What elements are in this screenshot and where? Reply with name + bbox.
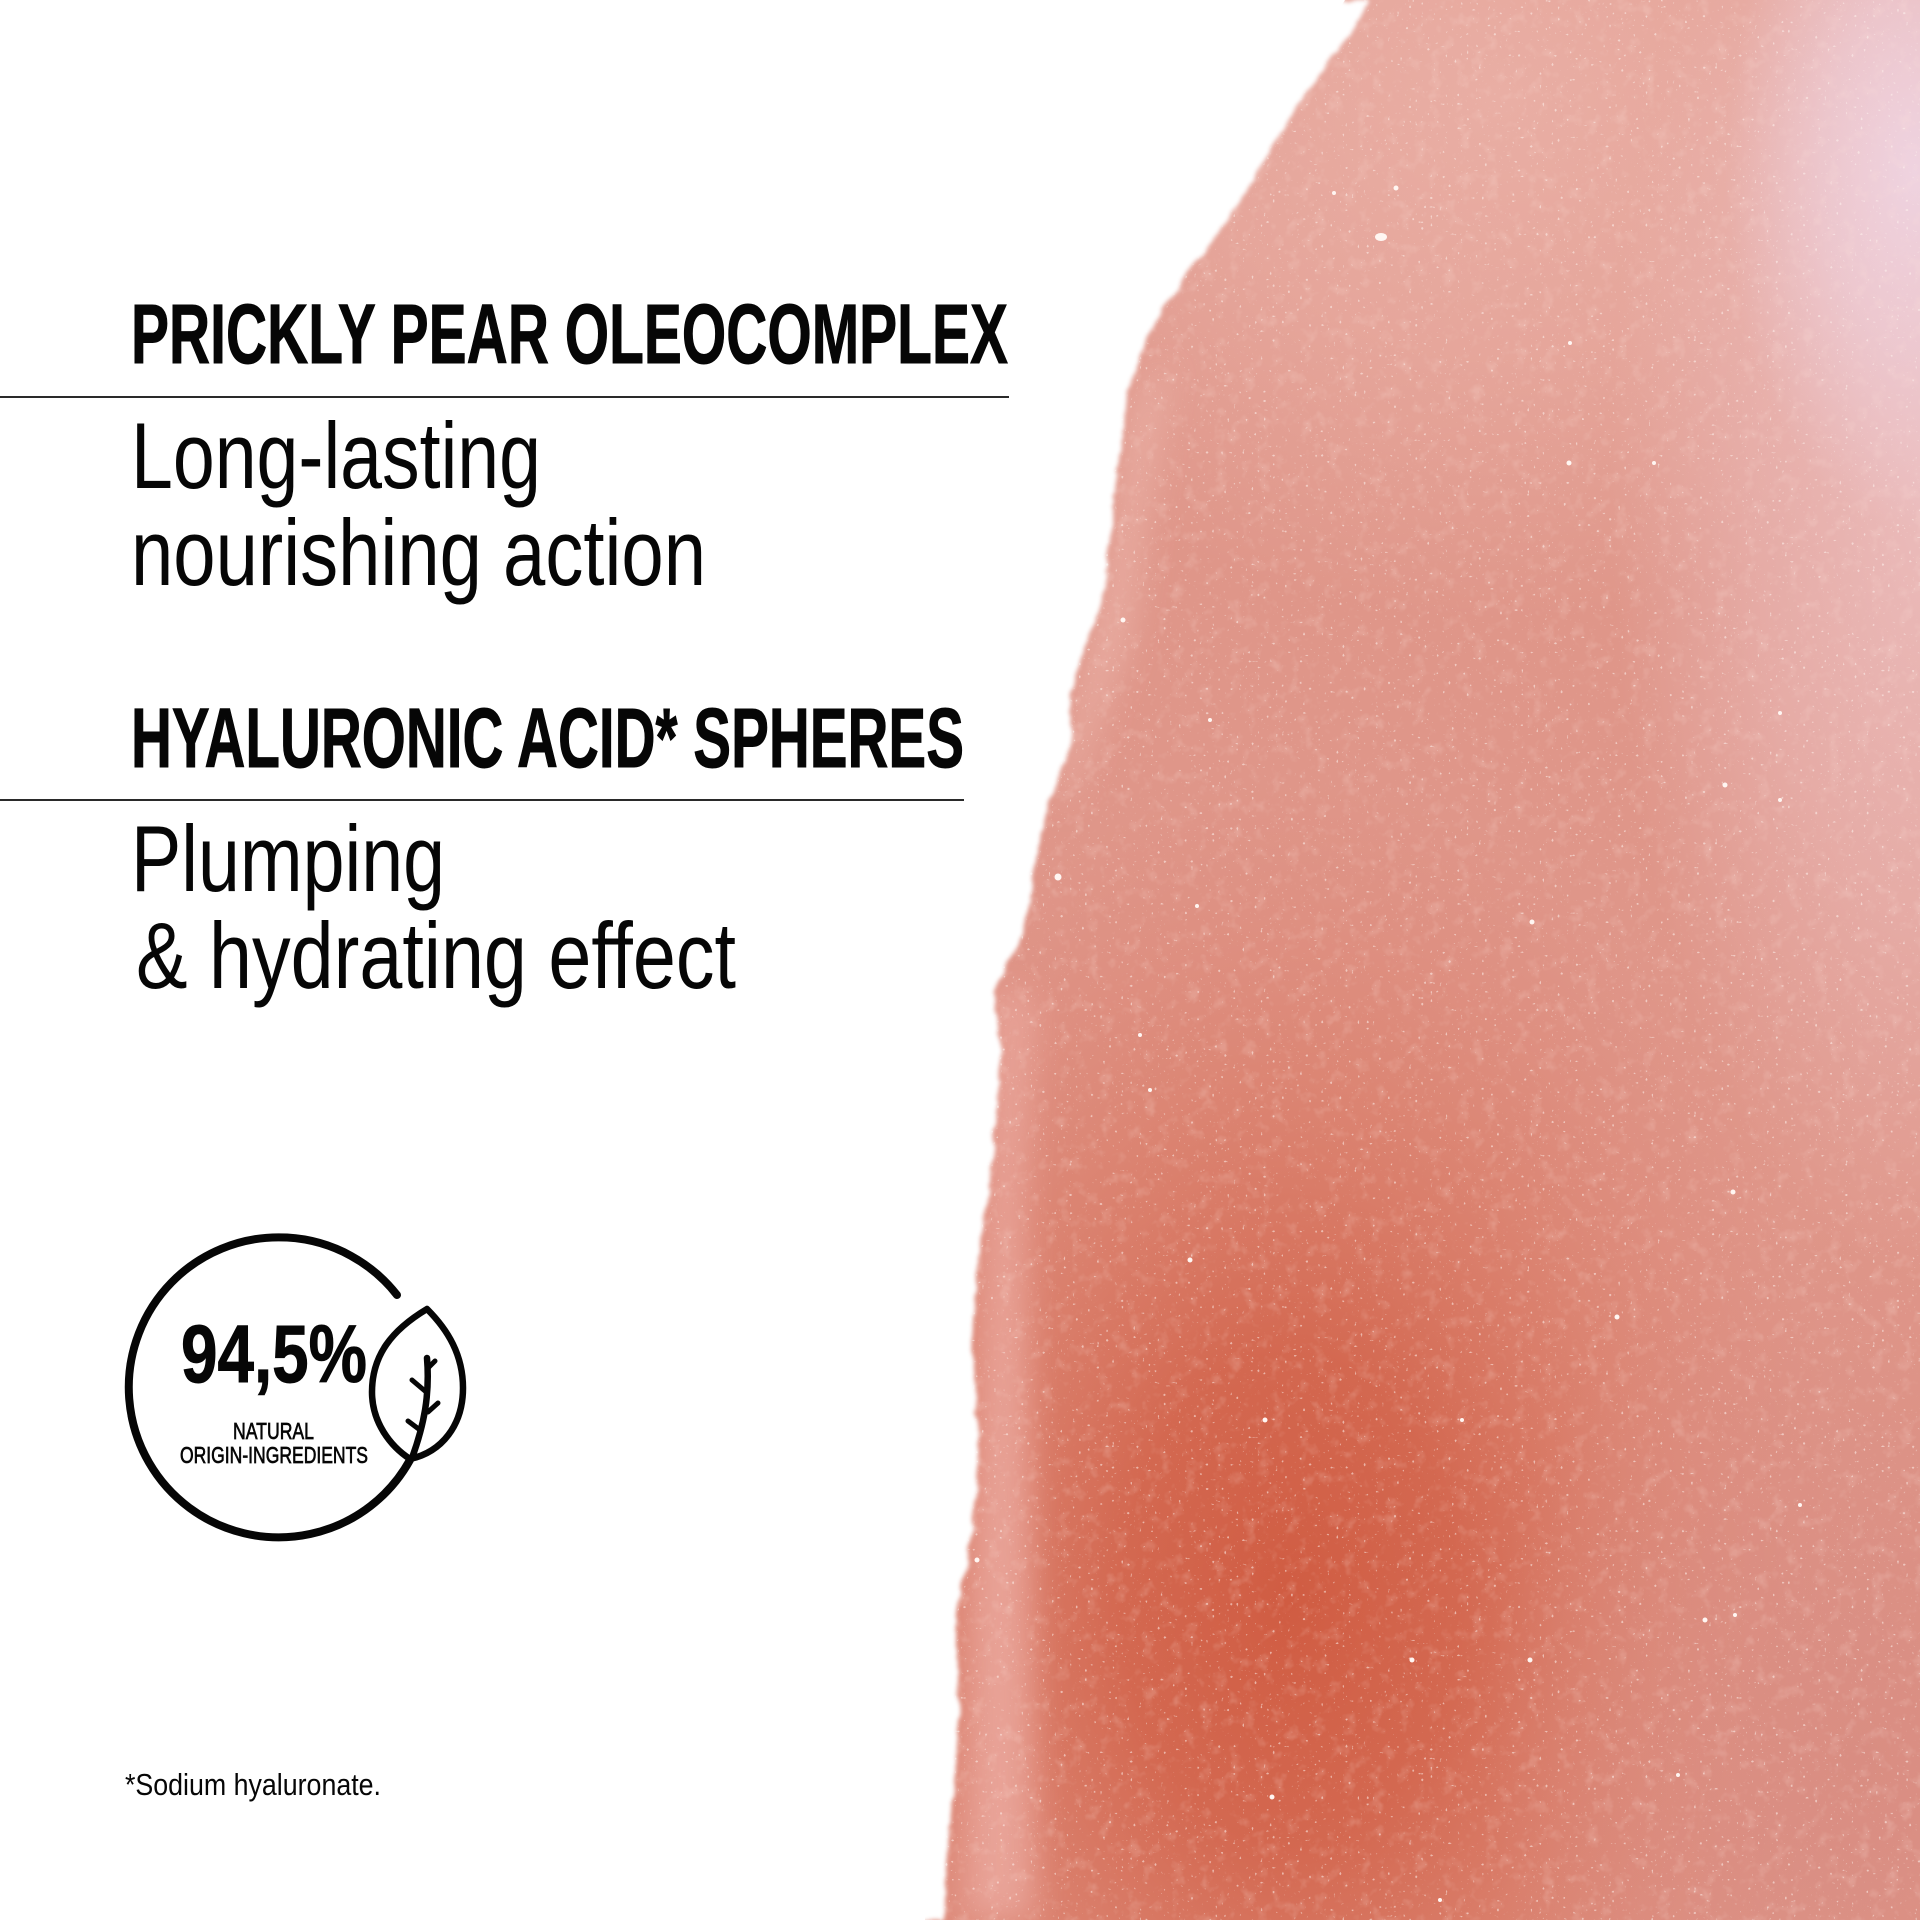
text block: plumping and hydrating effect bbox=[131, 806, 736, 1008]
footnote: *Sodium hyaluronate. bbox=[125, 1767, 381, 1802]
divider line 2 bbox=[0, 799, 964, 801]
heading: prickly pear oleocomplex: PRICKLY PEAR OLEOCOMPLEX bbox=[131, 287, 1008, 381]
image: pink-coral gel texture bbox=[880, 0, 1920, 1920]
text block: plumping and hydrating effect: & hydrating effect bbox=[136, 903, 736, 1008]
label: natural origin-ingredients bbox=[180, 1418, 368, 1468]
text block: plumping and hydrating effect: Plumping bbox=[131, 806, 445, 911]
text block: long-lasting nourishing action: nourishing action bbox=[131, 500, 706, 605]
icon: leaf bbox=[372, 1309, 463, 1459]
text block: long-lasting nourishing action: Long-lasting bbox=[131, 403, 541, 508]
icon: open circle bbox=[129, 1237, 410, 1537]
label: natural origin-ingredients: NATURAL bbox=[233, 1418, 314, 1444]
stat: 94,5%: 94,5% bbox=[181, 1309, 367, 1400]
heading: hyaluronic acid spheres: HYALURONIC ACID* SPHERES bbox=[131, 691, 964, 785]
label: natural origin-ingredients: ORIGIN-INGREDIENTS bbox=[180, 1442, 368, 1468]
divider line 1 bbox=[0, 396, 1009, 398]
text block: long-lasting nourishing action bbox=[131, 403, 706, 605]
badge: natural origin ingredients bbox=[129, 1237, 463, 1537]
